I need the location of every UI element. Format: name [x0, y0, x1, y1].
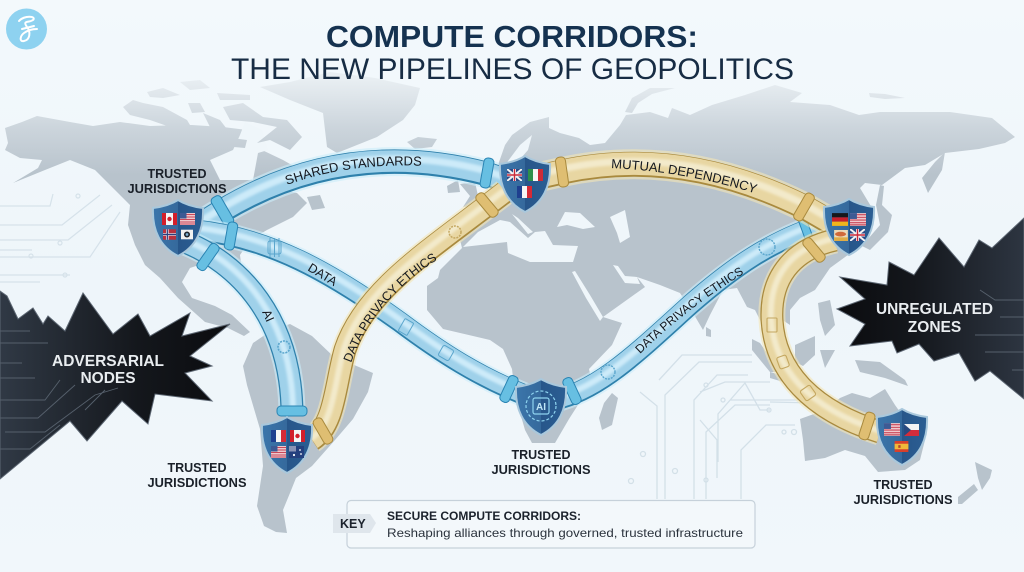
starburst: unregulated zones: [837, 218, 1024, 399]
key heading: SECURE COMPUTE CORRIDORS:: [387, 509, 581, 523]
collar: data west: [224, 221, 238, 251]
collar: data south: [499, 374, 519, 404]
map: Persian Gulf: [613, 265, 640, 284]
label: trusted jurisdictions north america: JURISDICTIONS: [128, 182, 226, 196]
pipe: mutual dependency: [535, 156, 830, 222]
map: Black Sea: [557, 212, 595, 229]
icon: ai chip: AI: [536, 402, 546, 413]
map: Australia: [800, 389, 925, 472]
map: Red Sea: [572, 271, 603, 321]
label: adversarial nodes: ADVERSARIAL: [52, 353, 164, 370]
shield: south america: [262, 417, 312, 473]
icon: chip on gold pipe: [776, 355, 790, 369]
icon: document on data pipe: [398, 318, 414, 336]
map: Madagascar: [599, 393, 618, 430]
map: Iceland: [407, 137, 437, 149]
label: adversarial nodes: NODES: [80, 370, 136, 387]
circuit pattern: left: [0, 194, 120, 282]
title: COMPUTE CORRIDORS:: [326, 19, 698, 54]
pipe: ai: [180, 238, 307, 416]
label: data privacy ethics gold: DATA PRIVACY ETHICS: [343, 254, 436, 362]
label: trusted jurisdictions australia: JURISDICTIONS: [854, 493, 952, 507]
map: Arctic Siberia islands: [869, 93, 905, 99]
label: trusted jurisdictions south america: TRUSTED: [167, 461, 227, 475]
collar: asia gold north: [801, 236, 827, 264]
key box: [333, 500, 755, 548]
key tag: [333, 514, 376, 533]
collar: shared standards west: [210, 194, 235, 227]
label: trusted jurisdictions south america: JURISDICTIONS: [148, 476, 246, 490]
key description: Reshaping alliances through governed, trusted infrastructure: [387, 526, 743, 540]
map: North America: [5, 116, 307, 336]
collar: ai south: [277, 406, 307, 416]
pipe: data privacy ethics blue: [555, 213, 830, 406]
map: Hudson Bay: [210, 122, 268, 180]
collar: data privacy east: [797, 213, 813, 241]
map: Baltic: [505, 135, 532, 175]
starburst: adversarial nodes: [0, 291, 230, 479]
icon: gear on gold dpe pipe: [449, 226, 461, 238]
icon: logo: [6, 8, 47, 50]
map: South America: [243, 324, 373, 533]
collar: gold dpe south: [312, 416, 334, 446]
shield: australia: [877, 409, 927, 465]
collar: mutual west: [555, 156, 569, 188]
shield: north america: [153, 200, 203, 256]
map: Arctic Islands: [123, 80, 302, 150]
shield: east asia: [824, 199, 874, 255]
label: shared standards: SHARED STANDARDS: [286, 156, 422, 184]
icon: mesh on gold pipe: [800, 385, 816, 401]
icon: document on gold pipe: [767, 318, 777, 332]
pipe: data privacy ethics gold: [311, 190, 505, 446]
collar: data privacy south: [562, 376, 582, 406]
label: ai: AI: [262, 312, 274, 322]
circuit pattern: center bottom: [628, 355, 815, 499]
icon: gear on ai pipe: [278, 341, 290, 353]
shield: africa ai: [516, 379, 566, 435]
map: Sri Lanka: [706, 327, 711, 337]
map: Japan: [862, 185, 892, 250]
collar: shared standards east: [479, 157, 495, 189]
key tag: KEY: [340, 517, 366, 531]
collar: ai north: [195, 242, 221, 272]
map: Greenland: [260, 72, 420, 153]
label: unregulated zones: UNREGULATED: [876, 301, 993, 318]
label: trusted jurisdictions africa: TRUSTED: [511, 448, 571, 462]
title: THE NEW PIPELINES OF GEOPOLITICS: [231, 53, 794, 86]
map: Newfoundland: [307, 195, 325, 210]
map: New Zealand: [958, 462, 992, 504]
world map: [5, 72, 1015, 533]
pipe: asia to australia gold: [767, 236, 880, 441]
map: Southeast Asia: [752, 300, 908, 386]
pipe: data: [195, 221, 530, 404]
label: unregulated zones: ZONES: [908, 319, 961, 336]
pipe: shared standards: [195, 157, 510, 228]
label: trusted jurisdictions africa: JURISDICTIONS: [492, 463, 590, 477]
icon: chip on data pipe south: [438, 345, 454, 361]
label: trusted jurisdictions australia: TRUSTED: [873, 478, 933, 492]
label: data: DATA: [308, 263, 336, 286]
title: [231, 19, 794, 86]
map: Adriatic: [512, 214, 533, 234]
label: trusted jurisdictions north america: TRUSTED: [147, 167, 207, 181]
label: data privacy ethics blue: DATA PRIVACY ETHICS: [635, 268, 743, 354]
label: mutual dependency: MUTUAL DEPENDENCY: [612, 159, 758, 192]
map: Mediterranean: [463, 220, 578, 262]
collar: gold dpe north: [474, 191, 500, 219]
icon: mesh on data privacy pipe: [601, 365, 615, 379]
map: Sakhalin: [922, 152, 945, 193]
icon: globe on data privacy pipe: [759, 239, 775, 255]
icon: chip on data pipe: [268, 238, 281, 257]
collar: mutual east: [792, 192, 816, 222]
map: Caspian Sea: [610, 210, 630, 243]
map: Novaya Zemlya: [625, 88, 675, 113]
shield: europe: [500, 156, 550, 212]
map: Afro-Eurasia: [427, 85, 1015, 443]
map: British Isles: [447, 180, 480, 207]
collar: asia gold south: [858, 411, 876, 441]
pipe labels: [262, 156, 758, 362]
